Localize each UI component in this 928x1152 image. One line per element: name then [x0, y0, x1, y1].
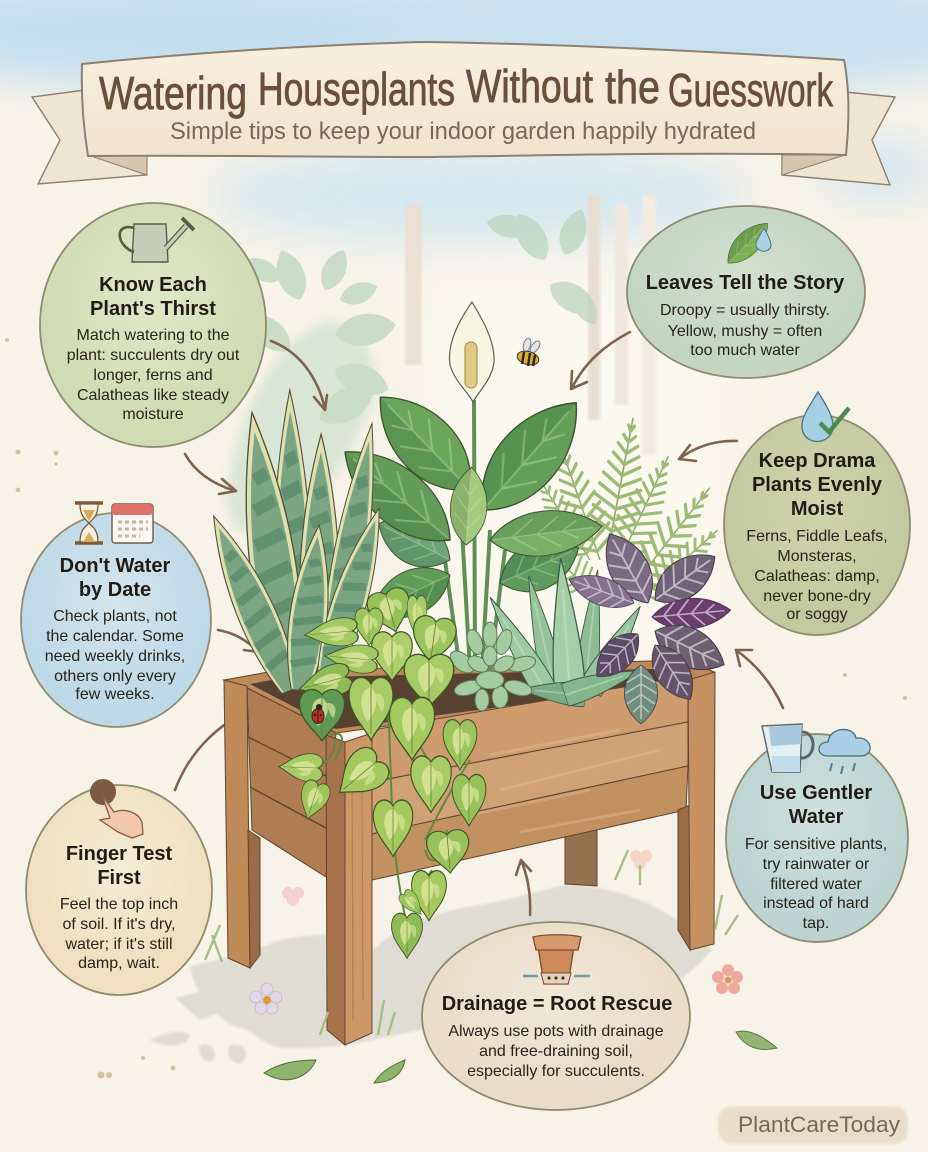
- snake plant: [196, 390, 395, 698]
- right post: [678, 672, 715, 950]
- body text: filtered water: [770, 876, 862, 893]
- body text: moisture: [122, 406, 184, 423]
- body text: few weeks.: [75, 686, 155, 703]
- bee: [516, 337, 542, 367]
- panel: keep drama plants evenly moist: [724, 392, 910, 635]
- banner title: [99, 60, 834, 119]
- body text: instead of hard: [763, 895, 869, 912]
- heading: Plant's Thirst: [90, 298, 216, 320]
- front post: [326, 733, 372, 1045]
- heading: Know Each: [99, 274, 207, 296]
- body text: Always use pots with drainage: [448, 1023, 664, 1040]
- banner title: Houseplants: [258, 63, 455, 115]
- panel: finger test first: [26, 779, 212, 995]
- body text: longer, ferns and: [93, 367, 213, 384]
- icon: filter pitcher and rain cloud: [762, 724, 870, 774]
- fold shadows: [88, 155, 845, 175]
- banner title: the: [605, 61, 660, 113]
- panel: don't water by date: [21, 503, 211, 727]
- body text: Ferns, Fiddle Leafs,: [746, 528, 888, 545]
- heading: Water: [789, 806, 844, 828]
- body text: Monsteras,: [777, 548, 857, 565]
- heading: by Date: [79, 579, 151, 601]
- heading: Don't Water: [60, 555, 171, 577]
- body text: Match watering to the: [77, 327, 230, 344]
- icon: hourglass and calendar: [75, 503, 153, 543]
- body text: and free-draining soil,: [479, 1043, 633, 1060]
- icon: drop with check: [802, 392, 849, 442]
- icon: terracotta pot: [523, 935, 590, 984]
- heading: Keep Drama: [759, 450, 876, 472]
- heading: Drainage = Root Rescue: [442, 993, 672, 1015]
- body text: Yellow, mushy = often: [668, 323, 822, 340]
- ladybug: [312, 704, 324, 724]
- body text: damp, wait.: [78, 955, 160, 972]
- panel: drainage = root rescue: [422, 922, 690, 1110]
- banner ribbon: [32, 42, 895, 185]
- back-left post: [224, 680, 260, 968]
- body text: plant: succulents dry out: [67, 347, 240, 364]
- banner title: Guesswork: [668, 64, 834, 116]
- pothos trailing plant: [278, 585, 486, 958]
- heading: Leaves Tell the Story: [646, 272, 845, 294]
- body text: Feel the top inch: [60, 896, 178, 913]
- body text: Calatheas: damp,: [754, 568, 880, 585]
- heading: Finger Test: [66, 843, 172, 865]
- body text: tap.: [803, 915, 829, 932]
- background foliage silhouettes: [225, 205, 604, 531]
- body text: need weekly drinks,: [45, 648, 185, 665]
- body text: Check plants, not: [53, 608, 177, 625]
- panel: leaves tell the story: [627, 206, 865, 378]
- banner title: Without: [466, 60, 593, 112]
- body text: of soil. If it's dry,: [62, 916, 176, 933]
- body text: too much water: [690, 342, 800, 359]
- body text: water; if it's still: [64, 936, 173, 953]
- ground flowers and fallen leaves: [205, 850, 777, 1083]
- planter back parts: [224, 660, 714, 886]
- heading: Plants Evenly: [752, 474, 883, 496]
- heading: Use Gentler: [760, 782, 872, 804]
- arrows from tips to plants: [175, 332, 783, 915]
- left side panel: [247, 688, 336, 877]
- planter box: [224, 672, 715, 1045]
- panel: use gentler water: [726, 724, 908, 942]
- banner title: Watering: [99, 67, 247, 119]
- body text: the calendar. Some: [46, 628, 184, 645]
- body text: others only every: [54, 668, 176, 685]
- watermark: PlantCareToday: [738, 1112, 900, 1137]
- left ribbon tail: [32, 90, 146, 184]
- succulent rosette: [446, 622, 537, 711]
- peace lily: [327, 302, 605, 670]
- body text: Calatheas like steady: [77, 387, 229, 404]
- body text: especially for succulents.: [467, 1063, 645, 1080]
- icon: leaf and water drop: [720, 215, 776, 271]
- icon: finger on soil: [90, 779, 143, 838]
- body text: try rainwater or: [763, 856, 870, 873]
- watermark: [718, 1106, 908, 1144]
- right ribbon tail: [782, 92, 895, 185]
- icon: watering can: [120, 218, 194, 262]
- panel: know each plant's thirst: [40, 203, 266, 447]
- calathea purple plant: [564, 524, 733, 724]
- body text: For sensitive plants,: [745, 836, 887, 853]
- front planks: [372, 676, 688, 880]
- banner body: [82, 42, 848, 157]
- body text: Droopy = usually thirsty.: [660, 302, 830, 319]
- body text: never bone-dry: [763, 588, 871, 605]
- aloe: [480, 557, 651, 707]
- heading: Moist: [791, 498, 843, 520]
- ground shadow wash: [150, 885, 712, 1064]
- fern: [516, 414, 731, 615]
- heading: First: [97, 867, 141, 889]
- body text: or soggy: [786, 606, 848, 623]
- banner subtitle: Simple tips to keep your indoor garden happily hydrated: [170, 118, 756, 145]
